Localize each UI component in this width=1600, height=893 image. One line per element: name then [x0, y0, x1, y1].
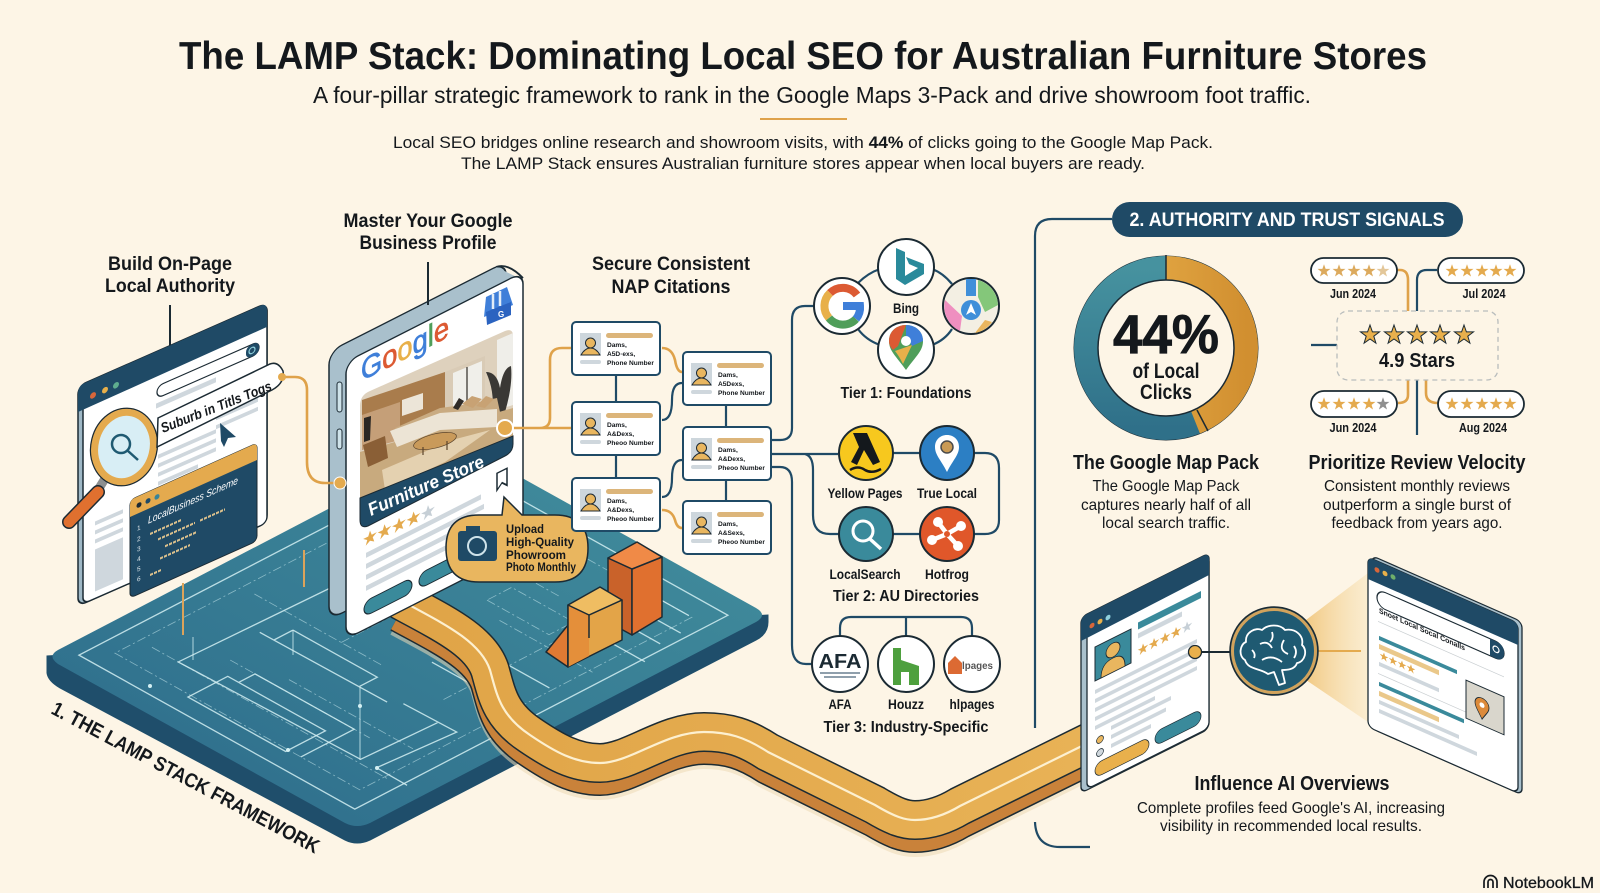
connector: heading to phone — [427, 262, 429, 305]
card: citation C — [572, 478, 660, 531]
banner: furniture store: Furniture Store — [365, 451, 487, 520]
code panel: 1 — [137, 524, 141, 533]
tier 2: AU directories: True Local — [917, 485, 977, 501]
tier 3: industry-specific: hlpages — [950, 696, 995, 712]
icon: hipages — [944, 636, 1000, 692]
connectors: citation network — [616, 348, 726, 528]
card: citation D: A5Dexs, — [718, 381, 744, 388]
icon: orange tall block — [608, 542, 662, 635]
framework label: 1. THE LAMP STACK FRAMEWORK — [48, 698, 323, 858]
tier 2: AU directories: LocalSearch — [830, 566, 900, 582]
rating summary — [1337, 311, 1498, 380]
chart: 44 percent donut: 44% — [1113, 303, 1219, 365]
card: citation D: Dams, — [718, 372, 738, 379]
icon: business profile storefront — [484, 287, 513, 325]
tier 3: industry-specific — [812, 636, 1000, 736]
tier 1: foundations: Tier 1: Foundations — [840, 385, 972, 402]
icon: maps app — [943, 278, 999, 334]
rating summary: 4.9 Stars — [1379, 350, 1455, 372]
card: citation B: Pheoo Number — [607, 440, 654, 447]
text block: google map pack: local search traffic. — [1102, 515, 1230, 532]
icon: Google Maps pin — [878, 322, 934, 378]
heading: google business profile — [344, 211, 512, 254]
panel: AI overview results — [1368, 554, 1522, 795]
accent rule — [760, 118, 847, 120]
code panel — [130, 443, 257, 598]
panel: blueprint platform — [47, 445, 768, 843]
card: citation E: Dams, — [718, 447, 738, 454]
review pill: Jul 2024: Jul 2024 — [1462, 287, 1506, 301]
panel: phone — [329, 253, 523, 648]
text block: google map pack: The Google Map Pack — [1073, 451, 1260, 474]
icon: magnifying glass — [69, 401, 165, 522]
code panel: 3 — [137, 545, 141, 554]
code panel: 4 — [137, 555, 141, 564]
tier 3: industry-specific: AFA — [828, 696, 852, 712]
tier 1: foundations: Bing — [893, 300, 919, 316]
photo: furniture showroom — [360, 330, 513, 498]
road: golden ribbon path — [400, 600, 1090, 837]
text block: influence AI overviews: visibility in recommended local results. — [1160, 818, 1422, 835]
review pill: Jun 2024 bottom — [1311, 391, 1397, 435]
tier 2: AU directories: Tier 2: AU Directories — [833, 588, 979, 605]
icon: AFA: AFA — [818, 651, 862, 673]
review pill: Jun 2024 top — [1311, 258, 1397, 301]
card: citation A — [572, 322, 660, 375]
code panel: 6 — [137, 575, 141, 584]
icon: Yellow Pages — [839, 426, 893, 480]
heading: on-page authority: Build On-Page — [108, 254, 232, 275]
title: The LAMP Stack: Dominating Local SEO for Australian Furniture Stores — [179, 35, 1427, 78]
card: citation E — [683, 427, 771, 480]
code panel: 2 — [137, 535, 141, 544]
callout: upload photo: Phowroom — [506, 548, 566, 562]
card: citation E: A&Dexs, — [718, 456, 745, 463]
text block: review velocity: Prioritize Review Velocity — [1308, 451, 1526, 474]
text block: google map pack: The Google Map Pack — [1092, 478, 1240, 495]
callout: upload photo: High-Quality — [506, 535, 574, 549]
footer: NotebookLM mark: NotebookLM — [1503, 875, 1594, 892]
card: citation D: Phone Number — [718, 390, 765, 397]
text block: review velocity: outperform a single burst of — [1323, 497, 1512, 514]
card: citation F: Pheoo Number — [718, 539, 765, 546]
tier 3: industry-specific: Houzz — [888, 696, 924, 712]
text block: influence AI overviews — [1137, 772, 1445, 835]
intro text: Local SEO bridges online research and showroom visits, with 44% of clicks going to the Google Map Pack. — [393, 133, 1213, 152]
tier 2: AU directories — [828, 426, 979, 605]
code panel: LocalBusiness Scheme — [148, 475, 238, 527]
tier 2: AU directories: Hotfrog — [925, 566, 969, 582]
card: citation F: Dams, — [718, 521, 738, 528]
chart: 44 percent donut: of Local — [1132, 360, 1200, 383]
icon: Hotfrog — [920, 507, 974, 561]
card: citation B: A&Dexs, — [607, 431, 634, 438]
panel: browser window — [78, 303, 267, 606]
icon: Google — [814, 278, 870, 334]
card: citation D — [683, 352, 771, 405]
icon: hipages: lpages — [962, 661, 993, 672]
rating stars — [363, 498, 435, 551]
icon: Bing — [878, 239, 934, 295]
card: citation F — [683, 501, 771, 554]
heading: NAP citations — [592, 254, 751, 298]
heading: google business profile: Business Profile — [360, 233, 496, 254]
card: citation A: Dams, — [607, 342, 627, 349]
callout: upload photo: Photo Monthly — [506, 560, 576, 574]
tier 1: foundations — [814, 239, 999, 402]
review pill: Jun 2024 top: Jun 2024 — [1330, 287, 1376, 301]
tier 3: industry-specific: Tier 3: Industry-Specific — [824, 719, 989, 736]
section bracket: authority — [1035, 219, 1112, 847]
tier 2: AU directories: Yellow Pages — [828, 485, 903, 501]
heading: NAP citations: Secure Consistent — [592, 254, 751, 275]
card: citation E: Pheoo Number — [718, 465, 765, 472]
subtitle: A four-pillar strategic framework to rank in the Google Maps 3-Pack and drive showroom foot traffic. — [313, 82, 1311, 108]
icon: AI brain — [1230, 607, 1318, 695]
card: citation C: Pheoo Number — [607, 516, 654, 523]
card: citation A: A5D·exs, — [607, 351, 635, 358]
text block: influence AI overviews: Influence AI Overviews — [1194, 772, 1390, 795]
panel: AI overview results: Snoet Local Socal Conalls — [1379, 606, 1466, 653]
heading pill: authority and trust signals — [1112, 202, 1463, 237]
icon: gold block — [546, 587, 622, 667]
intro text: The LAMP Stack ensures Australian furniture stores appear when local buyers are ready. — [461, 154, 1145, 173]
text block: google map pack — [1073, 451, 1260, 532]
heading pill: authority and trust signals: 2. AUTHORITY AND TRUST SIGNALS — [1130, 210, 1444, 231]
code panel: 5 — [137, 565, 141, 574]
card: citation A: Phone Number — [607, 360, 654, 367]
card: citation B — [572, 402, 660, 455]
icon: Houzz — [878, 636, 934, 692]
heading: on-page authority: Local Authority — [105, 276, 235, 297]
icon: AFA — [812, 636, 868, 692]
tag: suburb in title tags: Suburb in Titls Togs — [158, 378, 274, 436]
text block: review velocity — [1308, 451, 1526, 532]
review pill: Aug 2024: Aug 2024 — [1459, 421, 1507, 435]
card: citation C: A&Dexs, — [607, 507, 634, 514]
heading: NAP citations: NAP Citations — [612, 277, 730, 298]
review pill: Jul 2024 — [1438, 258, 1524, 301]
review pill: Aug 2024 — [1438, 391, 1524, 435]
chart: 44 percent donut — [1074, 255, 1258, 440]
chart: review velocity — [1311, 258, 1524, 435]
text block: influence AI overviews: Complete profiles feed Google's AI, increasing — [1137, 800, 1445, 817]
connector: profile to AI — [1188, 646, 1361, 658]
banner: furniture store — [360, 436, 513, 527]
text block: google map pack: captures nearly half of all — [1081, 497, 1251, 514]
text block: review velocity: Consistent monthly reviews — [1324, 478, 1510, 495]
callout: upload photo: Upload — [506, 522, 544, 536]
icon: business profile storefront: G — [498, 310, 504, 319]
intro text — [393, 133, 1213, 173]
callout: upload photo — [446, 497, 588, 582]
chart: 44 percent donut: Clicks — [1140, 381, 1192, 404]
icon: cursor — [220, 423, 236, 447]
card: citation B: Dams, — [607, 422, 627, 429]
connector: phone to citations — [497, 348, 572, 436]
icon: True Local — [920, 426, 974, 480]
connectors: tiers — [771, 269, 999, 664]
card: citation F: A&Sexs, — [718, 530, 745, 537]
beam: AI to results — [1306, 573, 1368, 722]
review pill: Jun 2024 bottom: Jun 2024 — [1330, 421, 1377, 435]
logo: Google: Google — [361, 308, 449, 388]
icon: LocalSearch — [839, 507, 893, 561]
connector: title tag to phone — [278, 373, 346, 489]
heading: google business profile: Master Your Google — [344, 211, 512, 232]
card: citation C: Dams, — [607, 498, 627, 505]
text block: review velocity: feedback from years ago. — [1332, 515, 1502, 532]
heading: on-page authority — [105, 254, 235, 348]
panel: complete profile card — [1081, 553, 1209, 793]
